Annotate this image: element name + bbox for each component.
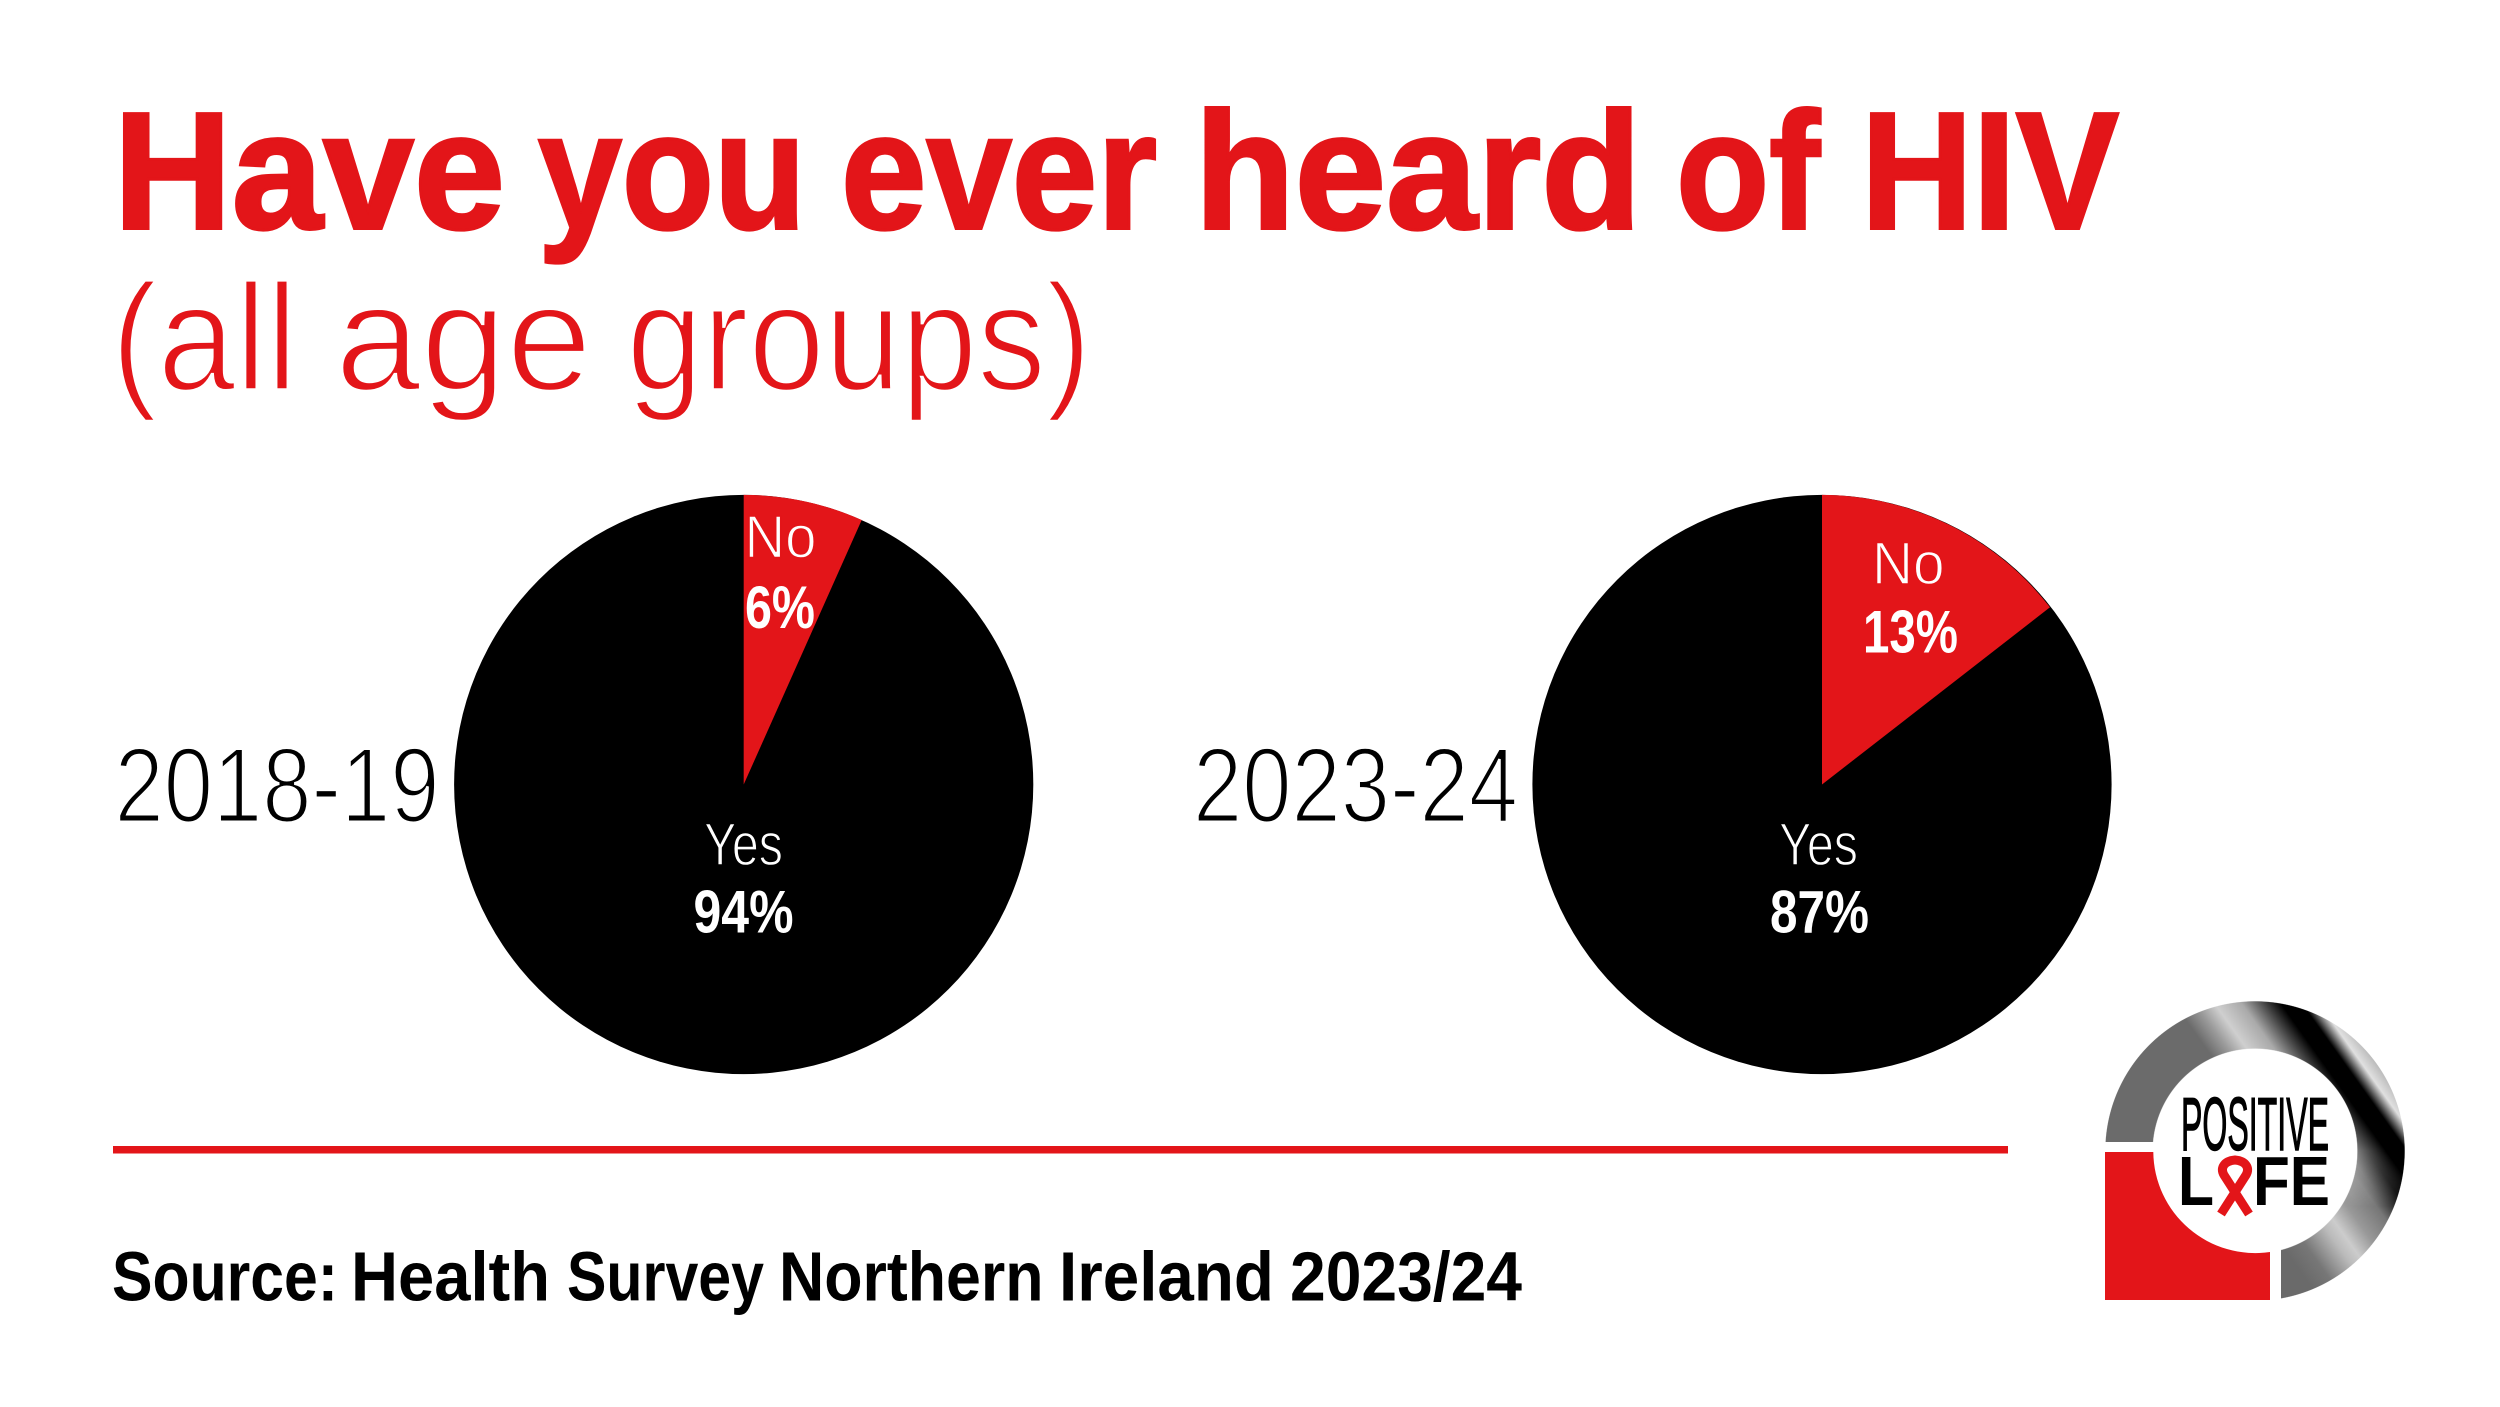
- title: [114, 78, 2119, 264]
- logo ring: [2106, 1001, 2405, 1298]
- value: 94%: 94%: [694, 879, 794, 946]
- wedge: No 13%: [1822, 495, 2050, 784]
- source note: 2023/24: [1290, 1238, 1522, 1316]
- title: Have: [114, 78, 505, 264]
- title: HIV: [1861, 78, 2119, 264]
- value: 13%: 13%: [1863, 598, 1958, 665]
- source note: Ireland: [1059, 1238, 1274, 1316]
- label: No: No: [1872, 530, 1945, 597]
- subtitle: [111, 253, 1092, 423]
- subtitle: age: [335, 253, 592, 423]
- year label: 2023-24: 2023-24: [1193, 725, 1518, 845]
- title: ever: [841, 78, 1157, 264]
- pie chart: 2023-24: [1532, 495, 2112, 1074]
- icon: red ribbon: [2221, 1160, 2249, 1214]
- value: 6%: 6%: [745, 574, 815, 641]
- logo mark and wordmark: [2105, 1082, 2330, 1300]
- logo: Positive Life: [2105, 1001, 2405, 1300]
- source note: [112, 1238, 1522, 1316]
- pie chart: 2018-19: [454, 495, 1033, 1074]
- logo word: FE: FE: [2253, 1142, 2330, 1220]
- label: No: No: [744, 504, 816, 571]
- wedge: No 6%: [744, 495, 862, 784]
- label: Yes: Yes: [704, 811, 783, 878]
- year label: 2018-19: 2018-19: [114, 725, 440, 845]
- title: heard: [1194, 78, 1642, 264]
- logo red block: [2105, 1152, 2270, 1300]
- source note: Source:: [112, 1238, 338, 1316]
- value: 87%: 87%: [1770, 879, 1869, 946]
- label: Yes: Yes: [1779, 811, 1858, 878]
- source note: Northern: [779, 1238, 1044, 1316]
- logo word: L: L: [2178, 1142, 2214, 1220]
- title: you: [538, 78, 806, 264]
- source note: Health: [351, 1238, 550, 1316]
- source note: Survey: [567, 1238, 764, 1316]
- subtitle: (all: [111, 253, 298, 423]
- subtitle: groups): [626, 253, 1092, 423]
- title: of: [1676, 78, 1820, 264]
